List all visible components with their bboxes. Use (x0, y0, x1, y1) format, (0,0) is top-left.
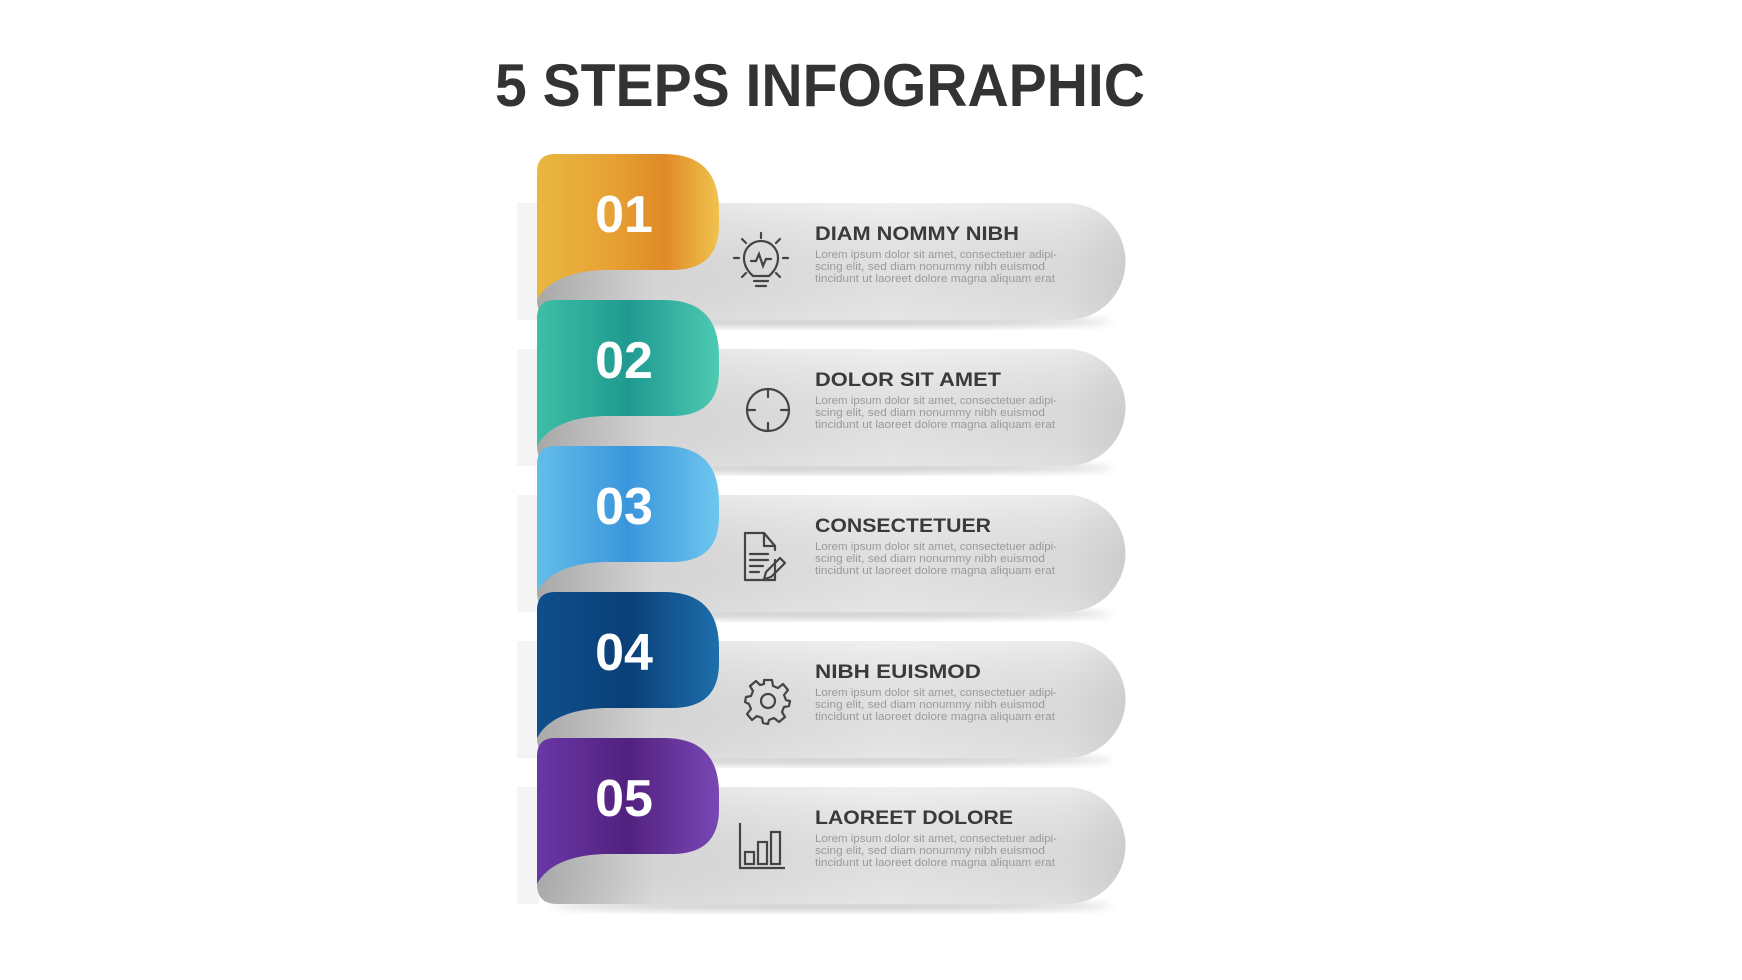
icon: target (747, 389, 789, 431)
step 3 (517, 446, 1126, 619)
heading 2: DOLOR SIT AMET (815, 370, 1001, 391)
body 2: Lorem ipsum dolor sit amet, consectetuer adipi- (815, 395, 1057, 407)
tab 05 (537, 738, 719, 884)
title: 5 STEPS INFOGRAPHIC (495, 52, 1145, 119)
tab 02 (537, 300, 719, 446)
step 5: 05 (595, 770, 653, 828)
step 3: 03 (595, 478, 653, 536)
icon: document with pencil (745, 533, 785, 580)
body 1: scing elit, sed diam nonummy nibh euismod (815, 261, 1045, 273)
icon: gear (745, 680, 790, 724)
heading 1: DIAM NOMMY NIBH (815, 224, 1019, 245)
icon: bar chart (740, 823, 785, 868)
body 5: scing elit, sed diam nonummy nibh euismod (815, 845, 1045, 857)
body 1: Lorem ipsum dolor sit amet, consectetuer adipi- (815, 249, 1057, 261)
body 3: tincidunt ut laoreet dolore magna aliquam erat (815, 565, 1055, 577)
tab 03 (537, 446, 719, 592)
steps wrapper (517, 154, 1126, 911)
icon: light bulb (734, 233, 788, 286)
heading 4: NIBH EUISMOD (815, 662, 981, 683)
body 3: scing elit, sed diam nonummy nibh euismod (815, 553, 1045, 565)
body 2: tincidunt ut laoreet dolore magna aliquam erat (815, 419, 1055, 431)
body 4: scing elit, sed diam nonummy nibh euismod (815, 699, 1045, 711)
tab 04 (537, 592, 719, 738)
step 4: 04 (595, 624, 653, 682)
body 1: tincidunt ut laoreet dolore magna aliquam erat (815, 273, 1055, 285)
step 2: 02 (595, 332, 653, 390)
step 4 (517, 592, 1126, 765)
body 2: scing elit, sed diam nonummy nibh euismod (815, 407, 1045, 419)
step 1 (517, 154, 1126, 327)
body 5: tincidunt ut laoreet dolore magna aliquam erat (815, 857, 1055, 869)
body 4: Lorem ipsum dolor sit amet, consectetuer adipi- (815, 687, 1057, 699)
body 3: Lorem ipsum dolor sit amet, consectetuer adipi- (815, 541, 1057, 553)
heading 3: CONSECTETUER (815, 516, 991, 537)
step 1: 01 (595, 186, 653, 244)
tab 01 (537, 154, 719, 300)
body 5: Lorem ipsum dolor sit amet, consectetuer adipi- (815, 833, 1057, 845)
heading 5: LAOREET DOLORE (815, 808, 1013, 829)
step 2 (517, 300, 1126, 473)
body 4: tincidunt ut laoreet dolore magna aliquam erat (815, 711, 1055, 723)
step 5 (517, 738, 1126, 911)
